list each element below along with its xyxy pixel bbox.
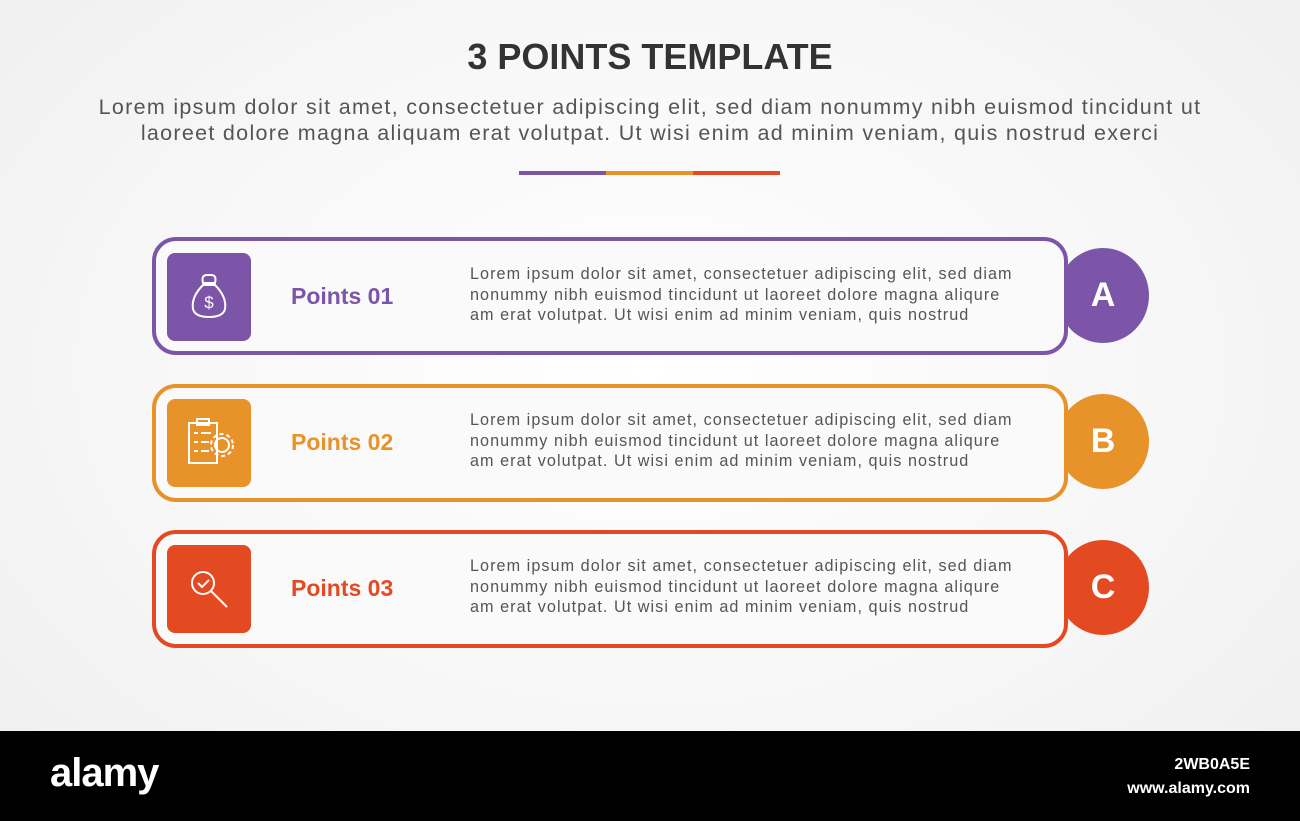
circle B bbox=[1057, 394, 1149, 489]
circle C bbox=[1057, 540, 1149, 635]
body text bbox=[470, 557, 1013, 616]
row 3 bbox=[152, 530, 1149, 648]
icon: money bag bbox=[167, 253, 251, 341]
box 3 bbox=[152, 530, 1068, 648]
box 1 bbox=[152, 237, 1068, 355]
label: Points 01 bbox=[291, 283, 393, 309]
circle B: B bbox=[1091, 422, 1115, 460]
row 2 bbox=[152, 384, 1149, 502]
body text: nonummy nibh euismod tincidunt ut laoreet dolore magna aliqure bbox=[470, 286, 1000, 304]
body text bbox=[470, 411, 1013, 470]
circle A: A bbox=[1091, 276, 1115, 314]
body text: am erat volutpat. Ut wisi enim ad minim veniam, quis nostrud bbox=[470, 306, 969, 324]
icon: money bag: $ bbox=[204, 293, 214, 312]
subtitle: Lorem ipsum dolor sit amet, consectetuer adipiscing elit, sed diam nonummy nibh euismod tincidunt ut bbox=[99, 95, 1201, 119]
body text: Lorem ipsum dolor sit amet, consectetuer adipiscing elit, sed diam bbox=[470, 265, 1013, 283]
box 2 bbox=[152, 384, 1068, 502]
body text bbox=[470, 265, 1013, 324]
subtitle: laoreet dolore magna aliquam erat volutpat. Ut wisi enim ad minim veniam, quis nostrud exerci bbox=[141, 121, 1159, 145]
icon: checklist gear bbox=[167, 399, 251, 487]
label: Points 03 bbox=[291, 575, 393, 601]
divider tricolor bbox=[519, 171, 780, 175]
label: Points 02 bbox=[291, 429, 393, 455]
body text: am erat volutpat. Ut wisi enim ad minim veniam, quis nostrud bbox=[470, 598, 969, 616]
footer logo: alamy bbox=[50, 751, 158, 795]
footer id: 2WB0A5E bbox=[1174, 756, 1250, 773]
icon: magnifier check bbox=[167, 545, 251, 633]
footer id: www.alamy.com bbox=[1127, 780, 1250, 797]
body text: nonummy nibh euismod tincidunt ut laoreet dolore magna aliqure bbox=[470, 432, 1000, 450]
footer bar bbox=[0, 731, 1300, 821]
circle A bbox=[1057, 248, 1149, 343]
body text: nonummy nibh euismod tincidunt ut laoreet dolore magna aliqure bbox=[470, 578, 1000, 596]
row 1 bbox=[152, 237, 1149, 355]
circle C: C bbox=[1091, 568, 1115, 606]
body text: am erat volutpat. Ut wisi enim ad minim veniam, quis nostrud bbox=[470, 452, 969, 470]
body text: Lorem ipsum dolor sit amet, consectetuer adipiscing elit, sed diam bbox=[470, 411, 1013, 429]
footer id bbox=[1127, 756, 1250, 797]
title: 3 POINTS TEMPLATE bbox=[467, 36, 833, 77]
body text: Lorem ipsum dolor sit amet, consectetuer adipiscing elit, sed diam bbox=[470, 557, 1013, 575]
subtitle bbox=[99, 95, 1201, 145]
